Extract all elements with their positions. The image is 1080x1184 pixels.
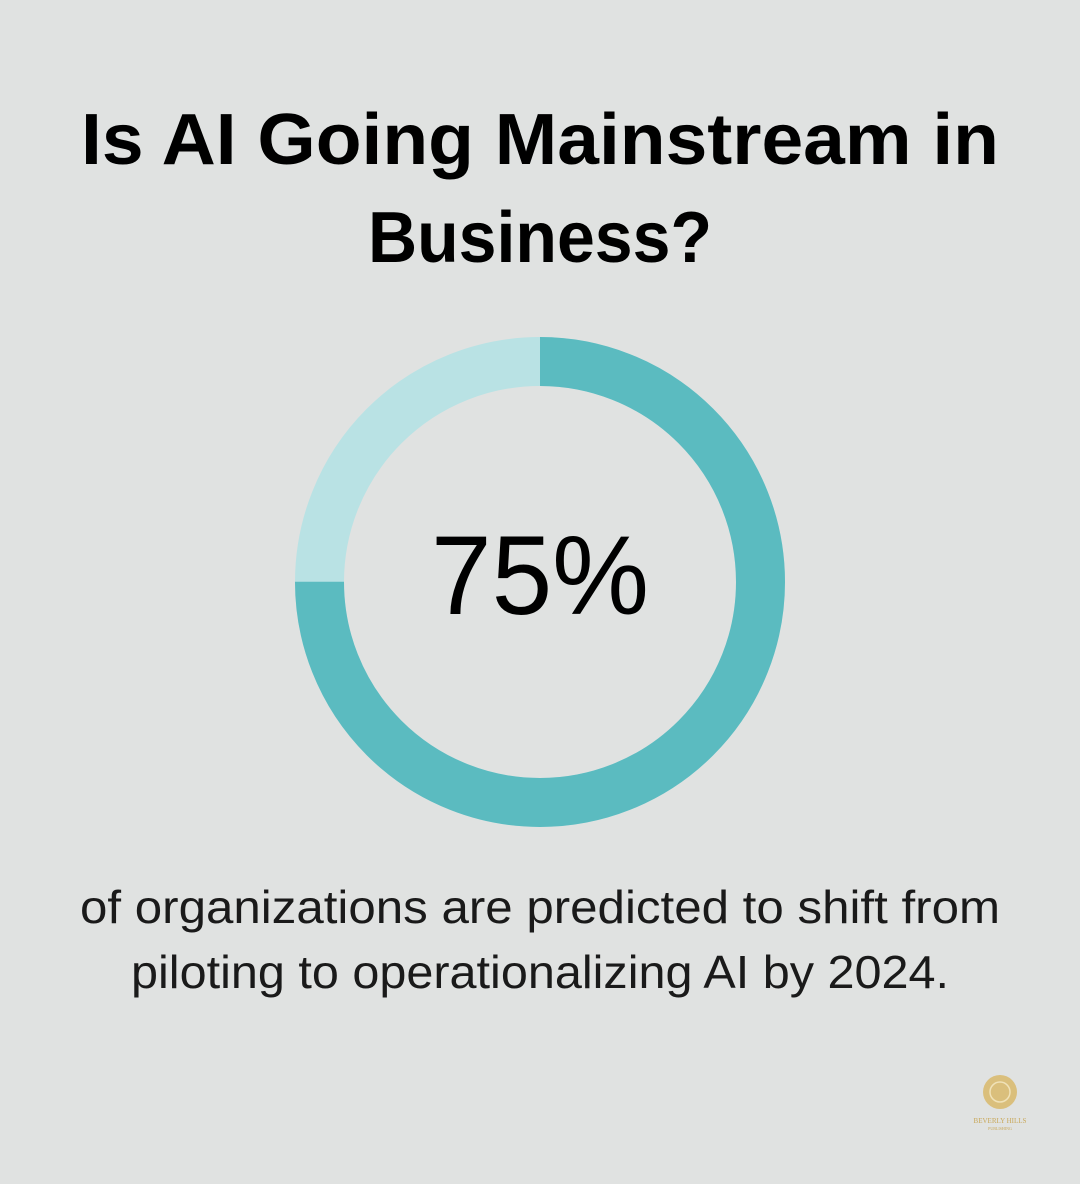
logo: PUBLISHING — [988, 1126, 1012, 1131]
title: Business? — [368, 198, 712, 278]
logo — [974, 1075, 1027, 1131]
title — [81, 100, 999, 278]
description text: of organizations are predicted to shift from — [80, 881, 1000, 933]
description text — [80, 881, 1000, 998]
description text: piloting to operationalizing AI by 2024. — [131, 946, 949, 998]
stat value: 75% — [431, 513, 649, 638]
logo: BEVERLY HILLS — [974, 1117, 1027, 1125]
donut chart — [320, 362, 760, 802]
title: Is AI Going Mainstream in — [81, 100, 999, 180]
